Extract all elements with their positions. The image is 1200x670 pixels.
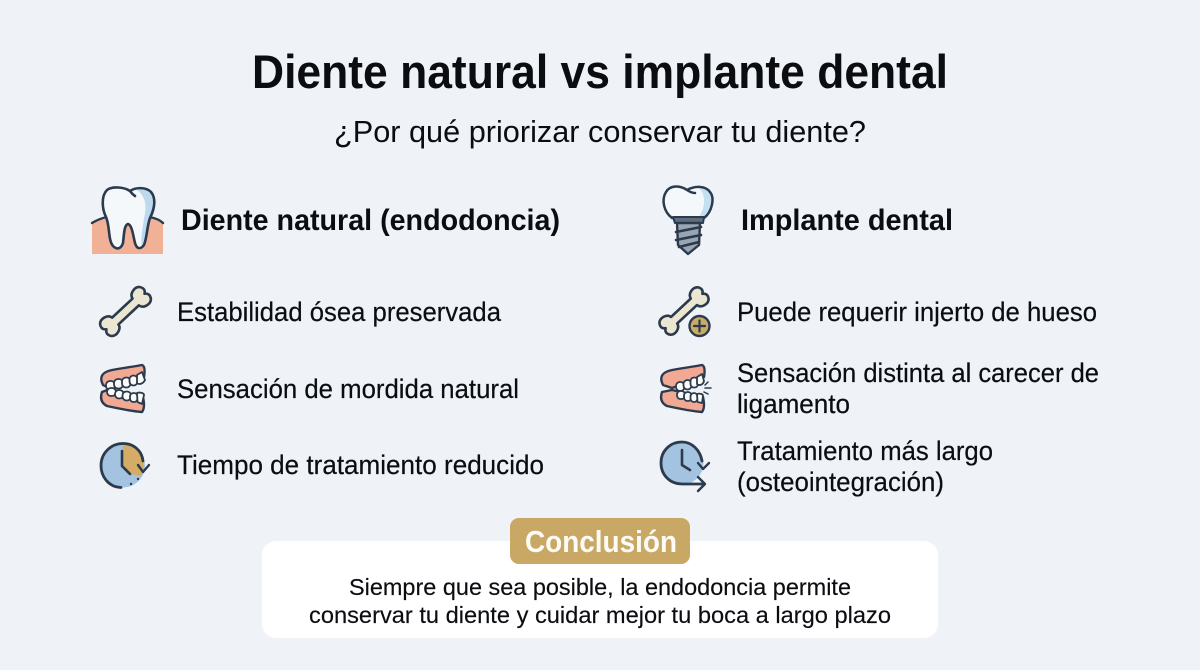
icon: bite with ligament marks: [661, 365, 711, 412]
title: Diente natural vs implante dental: [252, 45, 948, 98]
icon: bone with plus: [657, 285, 711, 337]
icon: natural tooth in gum: [92, 187, 163, 254]
icon: natural bite: [101, 365, 145, 412]
item: sensación distinta: [661, 358, 1099, 419]
panel: diente natural: [92, 187, 560, 487]
icon: long clock: [660, 442, 709, 491]
item: injerto de hueso: [657, 285, 1097, 337]
label: Sensación distinta al carecer de: [737, 358, 1099, 388]
icon: bone: [98, 284, 153, 339]
label continuation: (osteointegración): [737, 467, 944, 497]
heading: implante dental: Implante dental: [741, 204, 953, 237]
label: Estabilidad ósea preservada: [177, 297, 501, 327]
item: tratamiento largo: [660, 436, 993, 497]
label continuation: ligamento: [737, 389, 850, 419]
conclusion line 2: conservar tu diente y cuidar mejor tu boca a largo plazo: [309, 602, 891, 628]
label: Sensación de mordida natural: [177, 374, 519, 404]
item: tiempo reducido: [101, 444, 544, 488]
icon: dental implant: [664, 186, 712, 254]
icon: short clock: [101, 444, 149, 488]
badge: conclusión: Conclusión: [525, 524, 677, 559]
panel: implante dental: [657, 186, 1099, 497]
subtitle: ¿Por qué priorizar conservar tu diente?: [334, 114, 866, 149]
heading: diente natural: Diente natural (endodoncia): [181, 204, 560, 237]
label: Tiempo de tratamiento reducido: [177, 450, 544, 480]
conclusion line 1: Siempre que sea posible, la endodoncia permite: [349, 574, 851, 600]
panel: conclusion: [262, 518, 938, 638]
item: mordida natural: [101, 365, 519, 412]
badge: conclusión: [510, 518, 690, 564]
item: estabilidad ósea: [98, 284, 501, 339]
label: Tratamiento más largo: [737, 436, 993, 466]
conclusion card: [262, 541, 938, 638]
label: Puede requerir injerto de hueso: [737, 297, 1097, 327]
